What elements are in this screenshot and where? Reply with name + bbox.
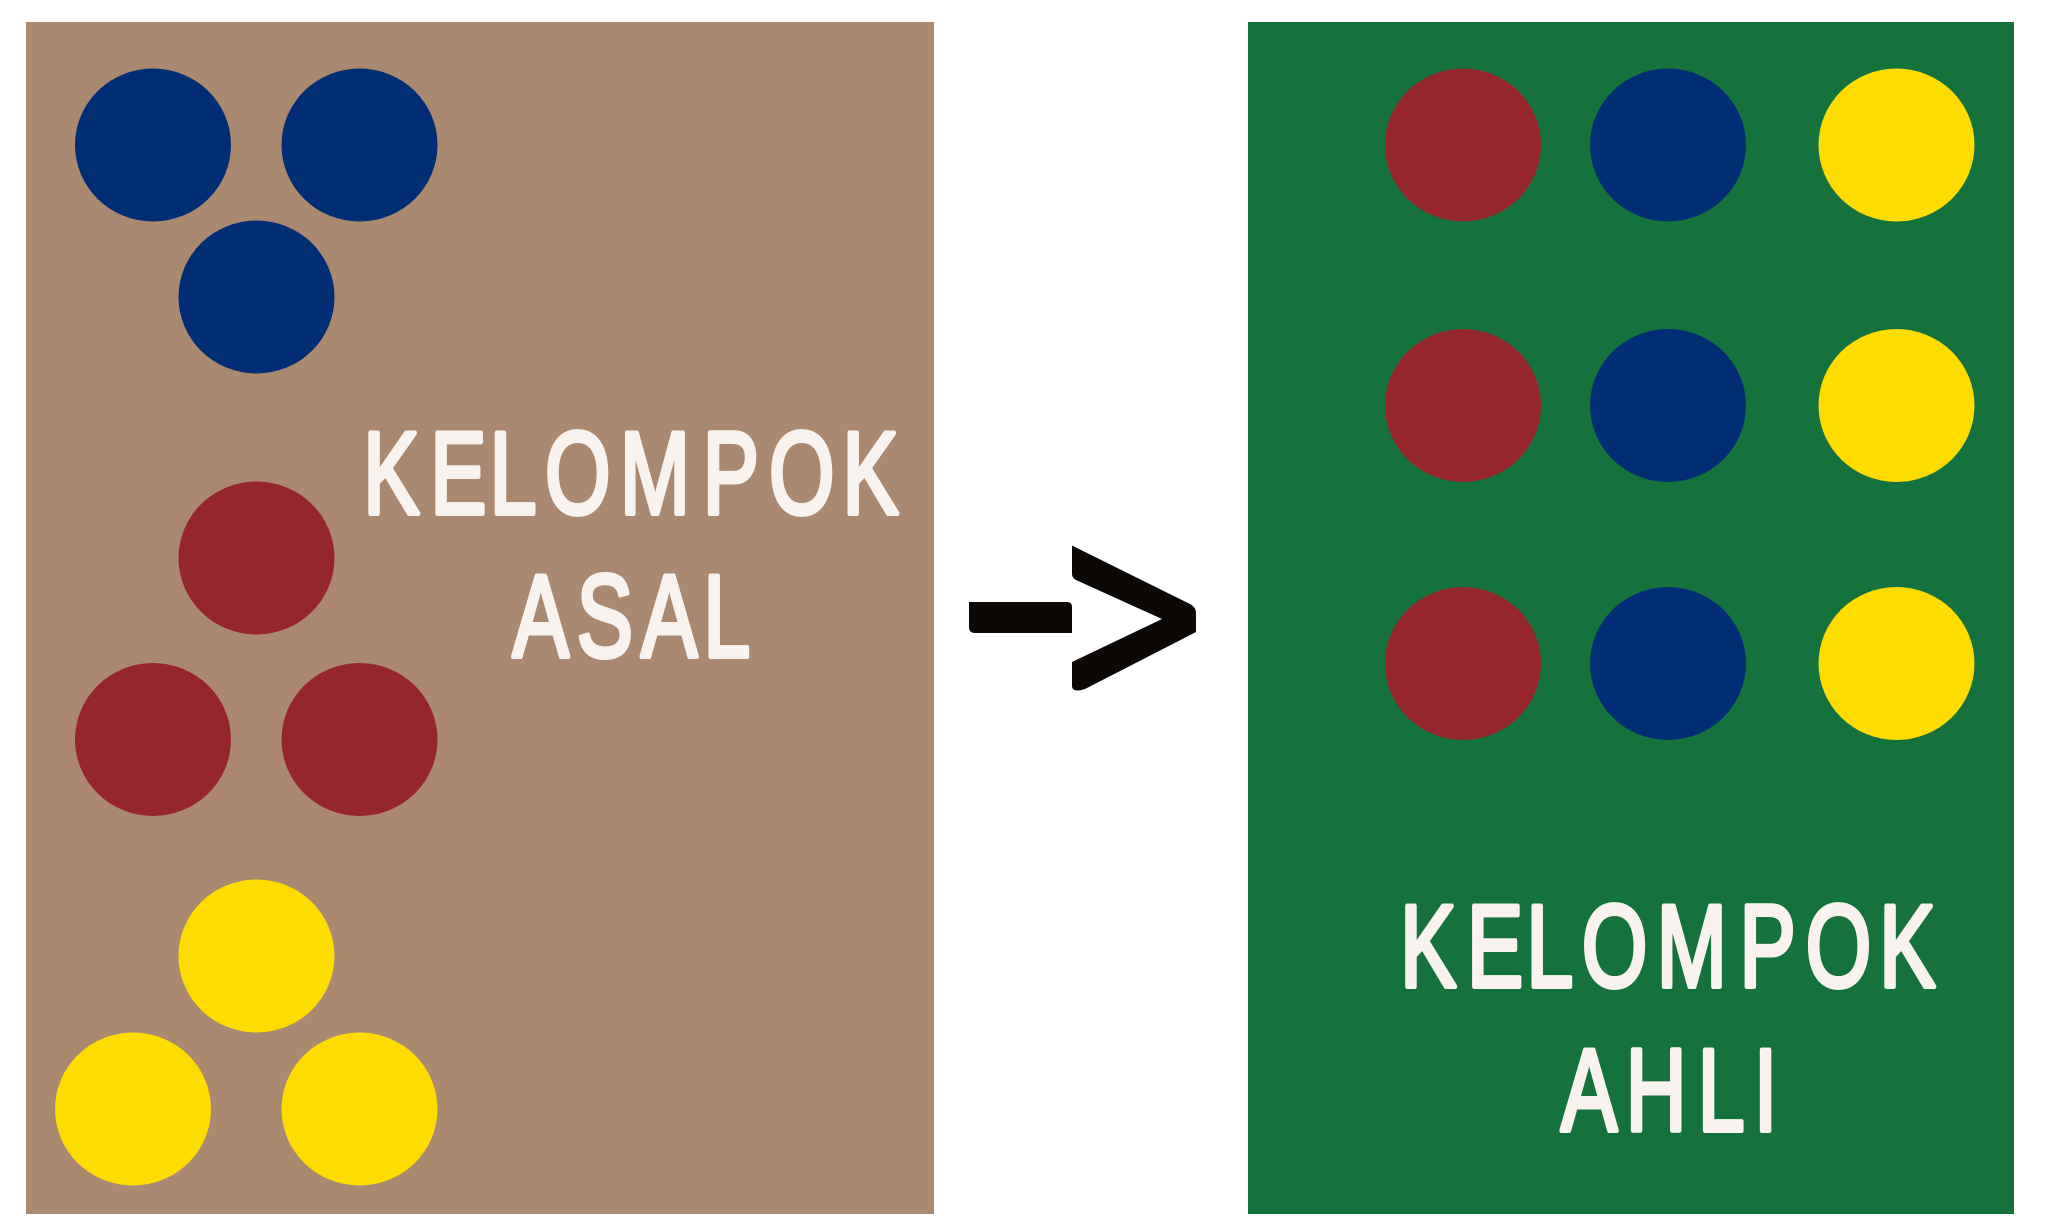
yellow circle column: [1818, 68, 1974, 740]
red circle column: [1385, 68, 1541, 740]
panel: kelompok asal: [26, 22, 934, 1214]
heading: kelompok ahli: KELOMPOK: [1400, 881, 1935, 1012]
heading: kelompok asal: KELOMPOK: [363, 408, 899, 539]
red circle group: [75, 482, 438, 816]
yellow circle group: [55, 880, 438, 1186]
heading: kelompok asal: [363, 408, 899, 682]
heading: kelompok ahli: [1400, 881, 1935, 1156]
arrow: [969, 546, 1196, 690]
panel: kelompok ahli: [1248, 22, 2014, 1214]
blue circle group: [75, 68, 438, 374]
heading: kelompok asal: ASAL: [513, 551, 750, 682]
blue circle column: [1590, 68, 1746, 740]
heading: kelompok ahli: AHLI: [1561, 1025, 1777, 1156]
